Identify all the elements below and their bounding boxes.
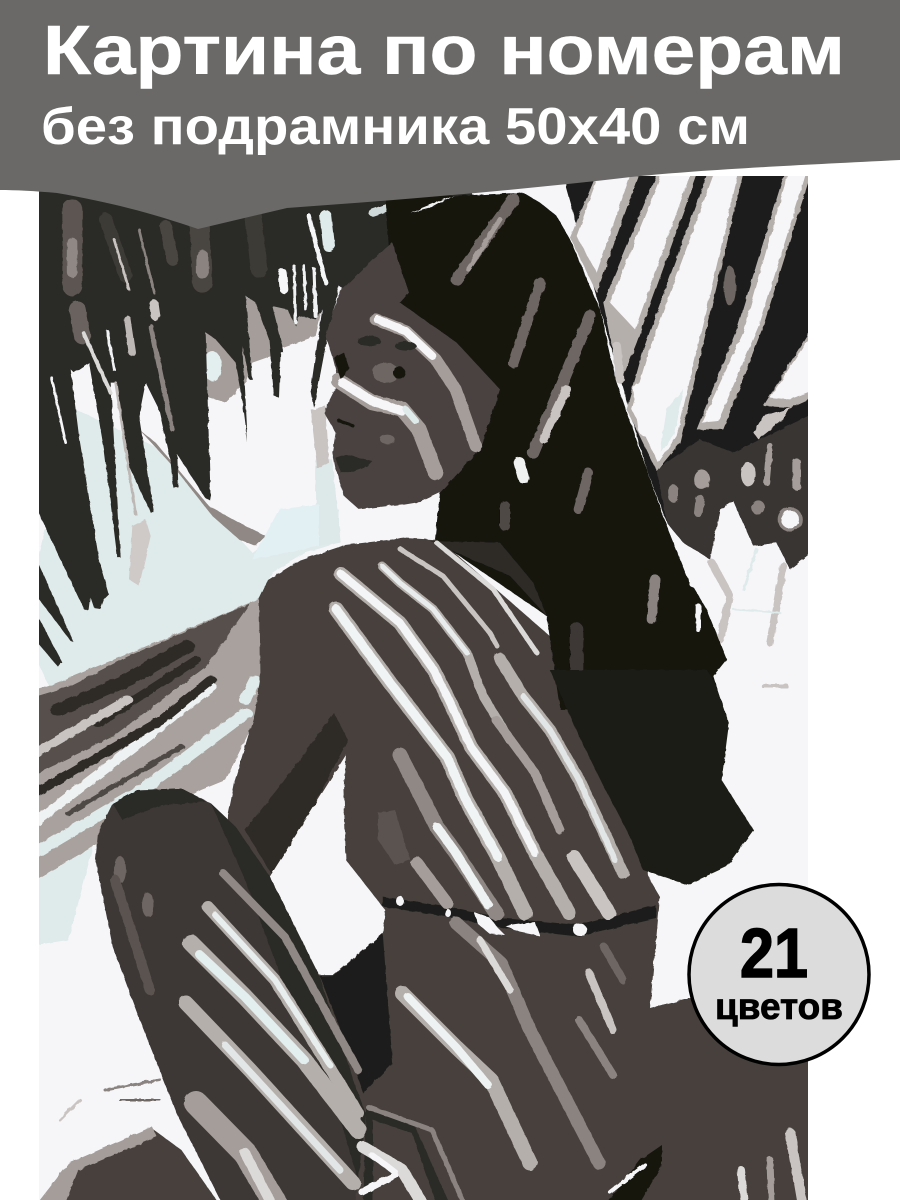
dark palm mass bbox=[29, 166, 472, 611]
hair bbox=[383, 166, 727, 709]
bottom left shape bbox=[44, 1128, 231, 1200]
left background and palm bbox=[29, 166, 472, 686]
face bbox=[324, 243, 500, 509]
belt beads bbox=[396, 896, 587, 936]
lattice in light area bbox=[712, 563, 730, 639]
subtitle: без подрамника 50х40 см bbox=[41, 98, 750, 156]
leg stripes bbox=[114, 856, 358, 1200]
back stripes bbox=[336, 543, 623, 913]
lower palm leaf bbox=[24, 598, 270, 947]
stomach stripes bbox=[402, 923, 623, 1163]
palm spots bbox=[741, 462, 756, 486]
palm mottling bbox=[62, 199, 83, 296]
badge label: цветов bbox=[715, 986, 843, 1027]
panel: painting bbox=[24, 166, 830, 1200]
banner bbox=[0, 0, 900, 229]
title: Картина по номерам bbox=[43, 11, 845, 89]
cheek light stripe bbox=[339, 381, 436, 473]
lower hair bbox=[550, 670, 754, 885]
eye and mouth details bbox=[357, 336, 381, 346]
left leg bbox=[95, 788, 366, 1200]
right palm bbox=[560, 166, 823, 686]
belt bbox=[383, 897, 657, 937]
badge: 21 colours bbox=[689, 884, 869, 1064]
forehead light stripe bbox=[376, 319, 476, 446]
body back bbox=[221, 538, 830, 1200]
hip lower thigh bbox=[363, 1107, 456, 1200]
bottom details bbox=[60, 1080, 805, 1200]
badge number: 21 bbox=[740, 914, 808, 992]
arm gap and torso shading bbox=[24, 755, 657, 1200]
